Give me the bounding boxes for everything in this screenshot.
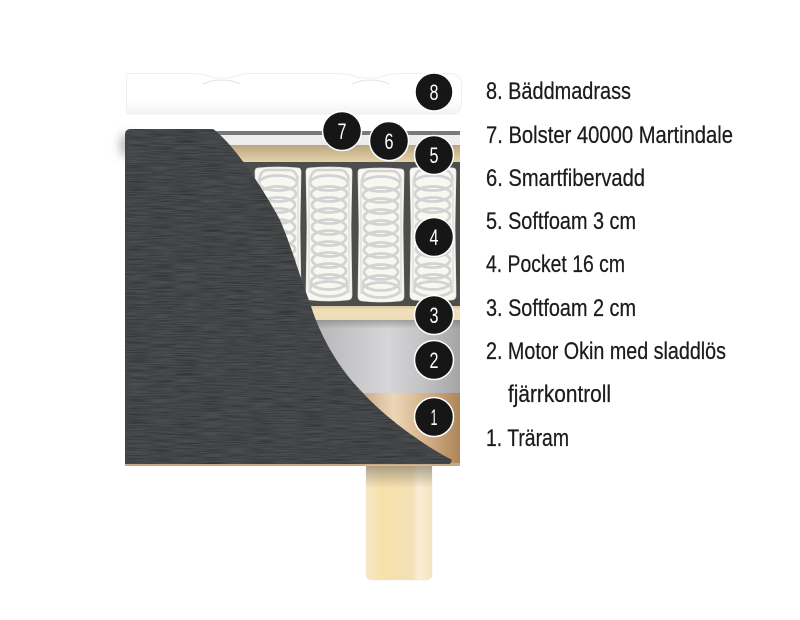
marker 4 — [414, 218, 454, 256]
marker 3: 3 — [430, 303, 438, 328]
marker 5 — [414, 136, 454, 174]
layer 1: wooden frame — [340, 393, 460, 466]
layer 4: pocket springs — [200, 162, 460, 306]
legend item 8: 8. Bäddmadrass — [486, 78, 631, 105]
layer 5: softfoam 3 cm — [200, 145, 460, 162]
layer 7: bolster cover — [200, 131, 460, 135]
legend item 4: 4. Pocket 16 cm — [486, 251, 625, 278]
marker 7 — [322, 112, 362, 150]
marker 1: 1 — [430, 405, 438, 430]
legend item 3: 3. Softfoam 2 cm — [486, 295, 636, 322]
layer 2: motor — [280, 320, 460, 393]
marker 2 — [414, 340, 454, 380]
legend item 2: 2. Motor Okin med sladdlös — [486, 338, 726, 365]
marker 1 — [414, 398, 454, 436]
legend item 5: 5. Softfoam 3 cm — [486, 208, 636, 235]
legend item 1: 1. Träram — [486, 425, 569, 452]
layer 8: bed mattress — [126, 74, 462, 114]
marker 2: 2 — [430, 348, 438, 373]
legend list — [486, 78, 733, 452]
marker 8 — [415, 73, 453, 111]
legend item 7: 7. Bolster 40000 Martindale — [486, 122, 733, 149]
marker 5: 5 — [430, 143, 438, 168]
shadow behind fabric — [121, 133, 131, 157]
marker 8: 8 — [430, 80, 438, 105]
legend item 2, second line: fjärrkontroll — [508, 381, 611, 408]
marker 6 — [370, 122, 408, 160]
legend item 6: 6. Smartfibervadd — [486, 165, 645, 192]
marker 6: 6 — [384, 129, 394, 154]
dark fabric cover — [125, 129, 452, 464]
bed leg — [366, 466, 432, 580]
marker 4: 4 — [430, 225, 438, 250]
layer 3: softfoam 2 cm — [200, 306, 460, 320]
marker 7: 7 — [338, 119, 346, 144]
layer 6: smart fibre padding — [200, 135, 460, 145]
marker 3 — [414, 296, 454, 334]
